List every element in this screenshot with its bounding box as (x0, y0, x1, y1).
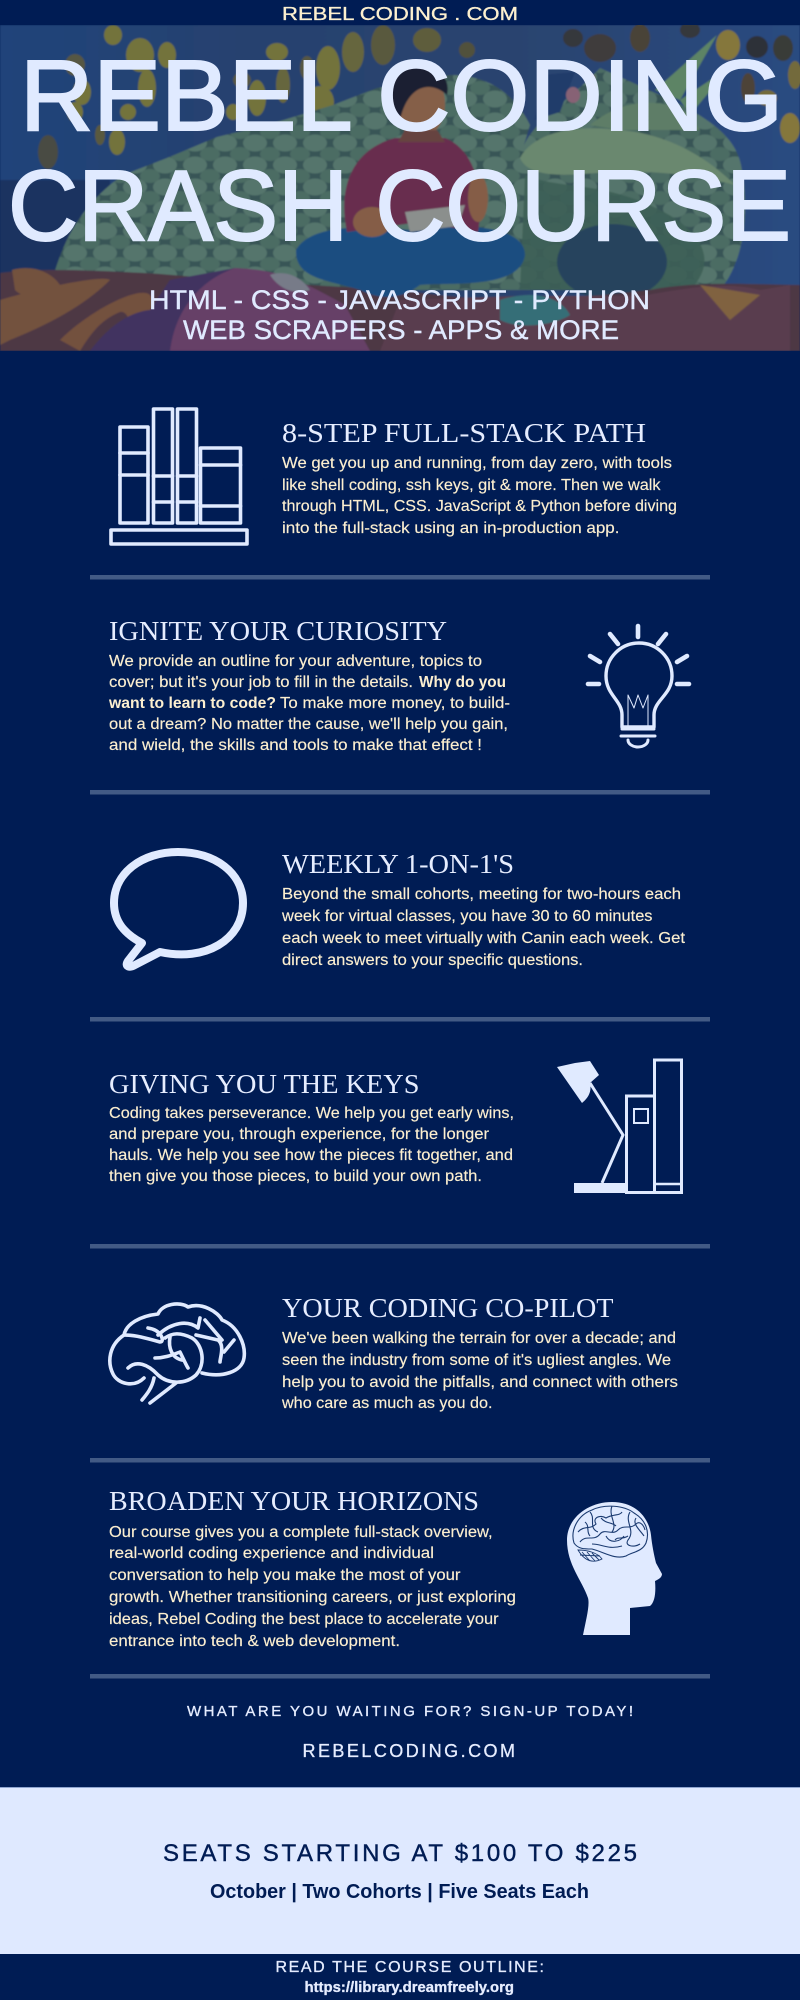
schedule line: October | Two Cohorts | Five Seats Each (210, 1881, 589, 1903)
footer outline link (276, 1959, 544, 1996)
icon: speech bubble (114, 852, 243, 967)
body text: Our course gives you a complete full-stack overview, (109, 1524, 493, 1541)
body text: cover; but it's your job to fill in the details. (109, 674, 413, 691)
panel: weekly 1-on-1's (114, 849, 686, 969)
icon: books on shelf (111, 409, 247, 544)
body text: into the full-stack using an in-production app. (282, 520, 620, 537)
body text: ideas, Rebel Coding the best place to accelerate your (109, 1611, 499, 1628)
title: REBEL CODING (20, 40, 783, 152)
body text (282, 455, 677, 537)
body text: We provide an outline for your adventure, topics to (109, 653, 482, 670)
body text: growth. Whether transitioning careers, or just exploring (109, 1589, 516, 1606)
body text: conversation to help you make the most of your (109, 1567, 461, 1584)
body text (281, 886, 686, 969)
body text: and wield, the skills and tools to make that effect ! (109, 737, 482, 754)
body text (108, 653, 510, 754)
panel: broaden your horizons (109, 1486, 662, 1650)
body text: entrance into tech & web development. (109, 1633, 400, 1650)
call to action: REBELCODING.COM (302, 1741, 515, 1761)
subtitle: WEB SCRAPERS - APPS & MORE (183, 315, 619, 345)
body text: help you to avoid the pitfalls, and connect with others (282, 1374, 678, 1391)
heading: IGNITE YOUR CURIOSITY (109, 616, 447, 646)
heading: YOUR CODING CO-PILOT (282, 1293, 614, 1323)
icon: light bulb (588, 626, 689, 747)
body text: We've been walking the terrain for over a decade; and (282, 1330, 676, 1347)
body text: Beyond the small cohorts, meeting for two-hours each (282, 886, 681, 903)
icon: head with brain (567, 1502, 662, 1635)
heading: WEEKLY 1-ON-1'S (282, 849, 514, 879)
body text: want to learn to code? (108, 695, 276, 712)
heading: 8-STEP FULL-STACK PATH (282, 418, 646, 448)
icon: desk lamp and books (557, 1060, 682, 1193)
footer outline link: READ THE COURSE OUTLINE: (276, 1959, 544, 1976)
body text: We get you up and running, from day zero, with tools (282, 455, 672, 472)
body text (281, 1330, 678, 1412)
body text: To make more money, to build- (280, 695, 510, 712)
body text: real-world coding experience and individual (109, 1545, 434, 1562)
body text: seen the industry from some of it's ugliest angles. We (282, 1352, 671, 1369)
mural tint (0, 25, 800, 351)
panel: giving you the keys (109, 1060, 682, 1193)
call to action (187, 1703, 633, 1761)
icon: brain (110, 1304, 244, 1403)
body text: like shell coding, ssh keys, git & more. Then we walk (282, 477, 662, 494)
body text: then give you those pieces, to build your own path. (109, 1168, 482, 1185)
hero mural photo (0, 22, 800, 351)
body text: each week to meet virtually with Canin each week. Get (282, 930, 686, 947)
top bar url: REBEL CODING . COM (282, 4, 518, 24)
panel: your coding co-pilot (110, 1293, 678, 1412)
subtitle (149, 285, 650, 345)
pricing heading: SEATS STARTING AT $100 TO $225 (163, 1840, 637, 1867)
panel: 8-step full-stack path (111, 409, 677, 544)
panel: pricing band (0, 1787, 800, 1954)
body text: direct answers to your specific questions. (282, 952, 583, 969)
body text: and prepare you, through experience, for the longer (109, 1126, 490, 1143)
panel: ignite your curiosity (108, 616, 689, 754)
body text: week for virtual classes, you have 30 to 60 minutes (281, 908, 652, 925)
call to action: WHAT ARE YOU WAITING FOR? SIGN-UP TODAY! (187, 1703, 633, 1720)
subtitle: HTML - CSS - JAVASCRIPT - PYTHON (149, 285, 650, 315)
heading: BROADEN YOUR HORIZONS (109, 1486, 479, 1516)
body text (109, 1524, 516, 1650)
heading: GIVING YOU THE KEYS (109, 1069, 420, 1099)
title (8, 40, 791, 262)
body text: through HTML, CSS. JavaScript & Python before diving (282, 498, 677, 515)
body text (109, 1105, 514, 1185)
title: CRASH COURSE (8, 150, 791, 262)
body text: Coding takes perseverance. We help you get early wins, (109, 1105, 514, 1122)
footer outline link: https://library.dreamfreely.org (304, 1980, 514, 1996)
body text: Why do you (419, 674, 506, 691)
body text: out a dream? No matter the cause, we'll help you gain, (109, 716, 508, 733)
body text: who care as much as you do. (281, 1395, 492, 1412)
body text: hauls. We help you see how the pieces fit together, and (109, 1147, 513, 1164)
